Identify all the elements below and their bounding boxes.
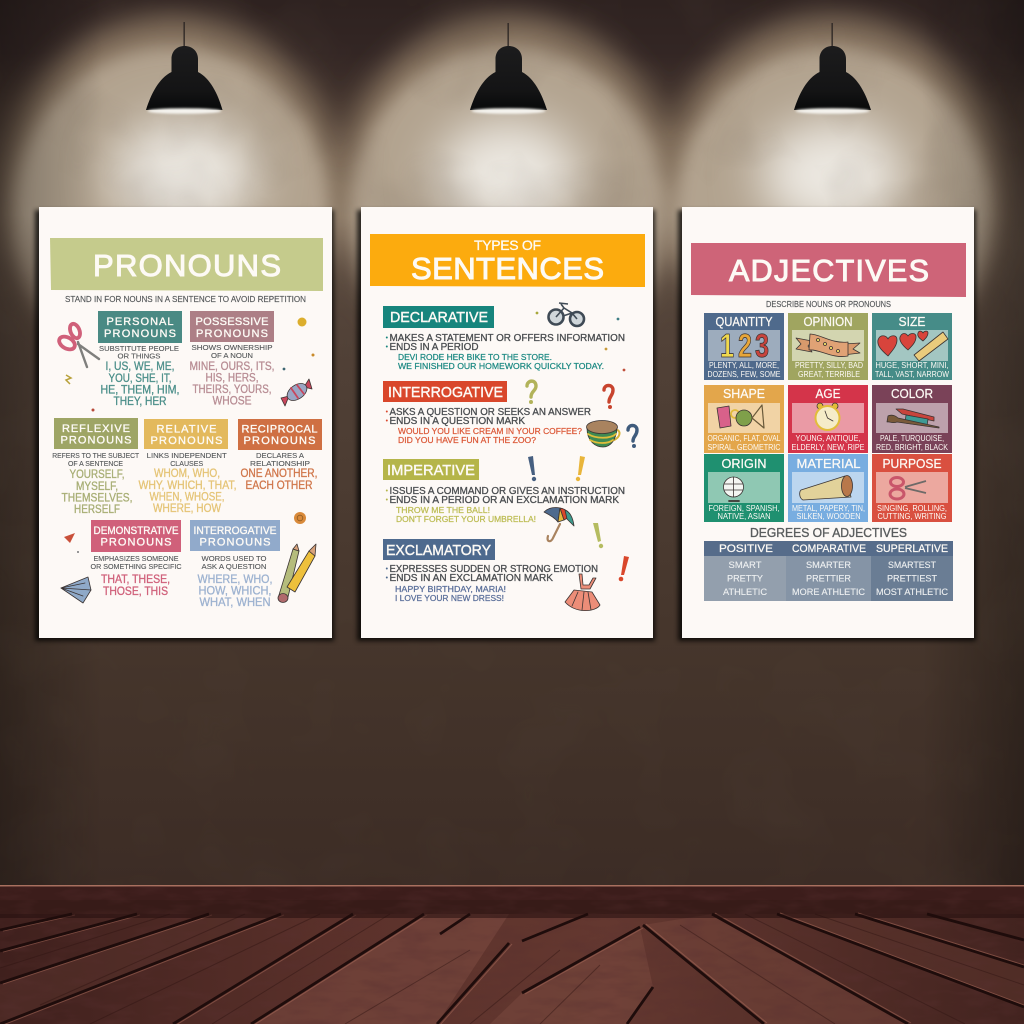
card: color: PALE, TURQUOISE,	[880, 434, 944, 443]
table: degrees of adjectives: MOST ATHLETIC	[876, 587, 948, 598]
relative pronouns: RELATIVE	[156, 424, 216, 436]
card: shape: SHAPE	[723, 387, 765, 401]
interrogative pronouns: ASK A QUESTION	[202, 562, 266, 571]
icon: ribbon	[796, 334, 860, 357]
interrogative pronouns	[190, 520, 280, 609]
section: interrogative	[383, 381, 591, 445]
baseboard	[0, 885, 1024, 915]
card: shape	[704, 385, 784, 453]
interrogative pronouns: WHERE, WHO,	[198, 573, 272, 586]
personal pronouns: THEY, HER	[114, 395, 166, 408]
card: opinion: GREAT, TERRIBLE	[798, 370, 860, 379]
personal pronouns: YOU, SHE, IT,	[108, 372, 172, 385]
icon: exclamation red	[619, 556, 629, 581]
icon: dress	[565, 574, 600, 611]
card: color: RED, BRIGHT, BLACK	[876, 443, 949, 452]
card: purpose: SINGING, ROLLING,	[877, 504, 947, 513]
title: types of sentences	[370, 234, 645, 287]
demonstrative pronouns: THAT, THESE,	[101, 573, 170, 586]
icon: scissors	[890, 478, 926, 499]
reflexive pronouns: OF A SENTENCE	[68, 459, 123, 468]
reflexive pronouns	[52, 418, 140, 516]
icon: globe	[724, 477, 744, 501]
possessive pronouns	[190, 311, 274, 408]
card: quantity	[704, 313, 784, 380]
demonstrative pronouns	[90, 520, 182, 598]
title: pronouns	[50, 238, 323, 291]
relative pronouns: WHOM, WHO,	[154, 467, 220, 480]
reflexive pronouns: HERSELF	[74, 503, 120, 516]
icon: question mark blue	[628, 426, 637, 448]
card: purpose: CUTTING, WRITING	[878, 512, 946, 521]
personal pronouns: SUBSTITUTE PEOPLE	[99, 344, 179, 353]
lamp 2	[470, 23, 547, 114]
icon: candy	[281, 379, 312, 406]
icon: scissors	[57, 322, 99, 367]
section: imperative: IMPERATIVE	[387, 462, 475, 479]
icon: shapes	[717, 405, 764, 428]
possessive pronouns: PRONOUNS	[196, 328, 268, 340]
possessive pronouns: POSSESSIVE	[196, 316, 268, 328]
reciprocal pronouns: DECLARES A	[256, 451, 305, 460]
lamp 1	[146, 22, 222, 114]
icon: umbrella	[544, 507, 574, 541]
card: color	[872, 385, 952, 453]
demonstrative pronouns: DEMONSTRATIVE	[94, 525, 178, 537]
section: imperative: ENDS IN A PERIOD OR AN EXCLAMATION MARK	[390, 495, 619, 506]
possessive pronouns: OF A NOUN	[211, 351, 253, 360]
icon: numbers: 3	[755, 327, 769, 364]
card: purpose	[872, 454, 952, 522]
relative pronouns: WHY, WHICH, THAT,	[138, 479, 236, 492]
card: material: MATERIAL	[796, 457, 861, 471]
reciprocal pronouns: PRONOUNS	[244, 435, 316, 447]
card: size: TALL, VAST, NARROW	[875, 370, 949, 379]
section: interrogative: INTERROGATIVE	[388, 384, 503, 401]
icon: question mark olive	[527, 381, 536, 404]
card: size	[872, 313, 952, 380]
section: interrogative: ENDS IN A QUESTION MARK	[390, 416, 525, 427]
card: quantity: DOZENS, FEW, SOME	[708, 370, 780, 379]
card: material	[788, 454, 868, 522]
section: exclamatory: ENDS IN AN EXCLAMATION MARK	[390, 573, 553, 584]
icon: paper plane	[61, 577, 91, 603]
reflexive pronouns: YOURSELF,	[70, 468, 124, 481]
personal pronouns	[98, 311, 182, 408]
demonstrative pronouns: THOSE, THIS	[103, 585, 168, 598]
card: age	[788, 385, 868, 453]
possessive pronouns: SHOWS OWNERSHIP	[192, 343, 272, 352]
icon: exclamation olive	[593, 523, 603, 548]
floor and baseboard	[0, 885, 1024, 1024]
section: imperative	[383, 459, 625, 524]
reflexive pronouns: MYSELF,	[76, 480, 118, 493]
icon: alarm clock	[816, 403, 840, 430]
panel: pronouns poster	[39, 207, 332, 638]
personal pronouns: HE, THEM, HIM,	[100, 384, 180, 396]
table: degrees of adjectives: PRETTY	[727, 574, 764, 584]
table: degrees of adjectives: ATHLETIC	[723, 587, 767, 598]
icon: swirl and confetti	[66, 318, 314, 553]
interrogative pronouns: PRONOUNS	[200, 536, 270, 548]
reciprocal pronouns: EACH OTHER	[246, 479, 312, 492]
icon: exclamation navy	[528, 456, 536, 481]
panel: sentences poster	[361, 207, 653, 638]
table: degrees of adjectives	[704, 541, 953, 601]
panel: adjectives poster	[682, 207, 974, 638]
table: degrees of adjectives: POSITIVE	[719, 543, 773, 555]
card: size: HUGE, SHORT, MINI,	[876, 361, 948, 370]
card: shape: ORGANIC, FLAT, OVAL	[708, 434, 781, 443]
possessive pronouns: THEIRS, YOURS,	[192, 383, 272, 396]
interrogative pronouns: WORDS USED TO	[202, 554, 267, 563]
reciprocal pronouns: RELATIONSHIP	[250, 459, 310, 468]
section: imperative: ISSUES A COMMAND OR GIVES AN INSTRUCTION	[390, 486, 625, 497]
title: types of sentences: TYPES OF	[474, 237, 541, 253]
personal pronouns: I, US, WE, ME,	[106, 360, 174, 373]
icon: exclamation yellow	[576, 456, 585, 481]
title: adjectives	[691, 243, 966, 297]
reciprocal pronouns: ONE ANOTHER,	[240, 467, 318, 480]
card: origin: NATIVE, ASIAN	[718, 512, 771, 521]
card: size: SIZE	[898, 315, 926, 329]
relative pronouns: WHERE, HOW	[153, 502, 221, 515]
relative pronouns	[138, 419, 236, 515]
reciprocal pronouns: RECIPROCAL	[242, 424, 318, 436]
section: declarative: WE FINISHED OUR HOMEWORK QUICKLY TODAY.	[398, 361, 604, 371]
section: interrogative: WOULD YOU LIKE CREAM IN YOUR COFFEE?	[398, 426, 582, 436]
card: opinion	[788, 313, 868, 380]
relative pronouns: PRONOUNS	[150, 435, 222, 447]
possessive pronouns: MINE, OURS, ITS,	[190, 360, 274, 373]
heading: degrees of adjectives: DEGREES OF ADJECTIVES	[750, 526, 907, 540]
reflexive pronouns: REFERS TO THE SUBJECT	[52, 451, 140, 460]
wood planks	[0, 913, 1024, 1024]
personal pronouns: PRONOUNS	[104, 328, 176, 340]
reciprocal pronouns	[238, 419, 322, 492]
possessive pronouns: HIS, HERS,	[206, 372, 258, 384]
subtitle: DESCRIBE NOUNS OR PRONOUNS	[766, 299, 891, 309]
title: pronouns: PRONOUNS	[93, 248, 281, 283]
icon: bicycle	[548, 303, 584, 326]
section: declarative: DECLARATIVE	[390, 309, 488, 326]
table: degrees of adjectives: COMPARATIVE	[792, 543, 866, 555]
confetti dots	[536, 312, 625, 371]
section: imperative: DON'T FORGET YOUR UMBRELLA!	[396, 514, 536, 524]
section: declarative: ENDS IN A PERIOD	[390, 342, 478, 353]
interrogative pronouns: INTERROGATIVE	[194, 525, 276, 537]
possessive pronouns: WHOSE	[212, 394, 252, 408]
section: interrogative: ASKS A QUESTION OR SEEKS AN ANSWER	[390, 407, 591, 418]
relative pronouns: WHEN, WHOSE,	[150, 490, 224, 504]
table: degrees of adjectives: SMART	[728, 560, 762, 571]
icon: numbers	[720, 327, 769, 364]
reflexive pronouns: THEMSELVES,	[62, 492, 132, 504]
icon: pencils	[278, 544, 316, 602]
personal pronouns: PERSONAL	[106, 316, 174, 328]
reflexive pronouns: REFLEXIVE	[62, 423, 130, 435]
card: color: COLOR	[891, 387, 933, 401]
section: exclamatory: HAPPY BIRTHDAY, MARIA!	[395, 584, 506, 594]
card: purpose: PURPOSE	[882, 457, 942, 471]
icon: crayon and paintbrush	[887, 409, 939, 428]
section: exclamatory: I LOVE YOUR NEW DRESS!	[395, 593, 504, 603]
icon: coffee cup	[586, 420, 620, 447]
section: declarative: DEVI RODE HER BIKE TO THE STORE.	[398, 352, 552, 362]
table: degrees of adjectives: PRETTIER	[806, 574, 851, 584]
icon: numbers: 1	[720, 327, 734, 364]
card: age: AGE	[816, 387, 840, 401]
title: types of sentences: SENTENCES	[411, 251, 604, 286]
icon: small red plane	[64, 533, 75, 543]
subtitle: STAND IN FOR NOUNS IN A SENTENCE TO AVOID REPETITION	[65, 294, 306, 304]
table: degrees of adjectives: SUPERLATIVE	[876, 543, 948, 555]
icon: log	[800, 476, 852, 500]
table: degrees of adjectives: SMARTER	[806, 560, 851, 571]
table: degrees of adjectives: PRETTIEST	[887, 574, 937, 584]
card: quantity: PLENTY, ALL, MORE,	[709, 361, 779, 370]
card: origin: ORIGIN	[722, 457, 766, 471]
demonstrative pronouns: OR SOMETHING SPECIFIC	[90, 562, 182, 571]
reflexive pronouns: PRONOUNS	[60, 434, 132, 446]
title: adjectives: ADJECTIVES	[729, 254, 929, 288]
card: origin	[704, 454, 784, 522]
icon: question mark red	[604, 386, 613, 409]
interrogative pronouns: WHAT, WHEN	[200, 596, 270, 609]
card: shape: SPIRAL, GEOMETRIC	[708, 443, 781, 452]
card: material: METAL, PAPERY, TIN,	[792, 504, 865, 513]
table: degrees of adjectives: SMARTEST	[888, 560, 936, 571]
demonstrative pronouns: PRONOUNS	[100, 536, 172, 548]
section: declarative: MAKES A STATEMENT OR OFFERS INFORMATION	[390, 333, 625, 344]
relative pronouns: CLAUSES	[170, 459, 203, 468]
card: opinion: PRETTY, SILLY, BAD	[795, 361, 863, 370]
card: material: SILKEN, WOODEN	[796, 512, 861, 521]
card: quantity: QUANTITY	[716, 315, 773, 329]
card: opinion: OPINION	[804, 315, 852, 329]
card: origin: FOREIGN, SPANISH,	[708, 504, 780, 513]
table: degrees of adjectives: MORE ATHLETIC	[792, 587, 865, 598]
icon: hearts and ruler	[878, 331, 948, 361]
section: exclamatory: EXPRESSES SUDDEN OR STRONG EMOTION	[390, 564, 598, 575]
icon: numbers: 2	[738, 327, 752, 364]
section: exclamatory	[383, 539, 598, 603]
interrogative pronouns: HOW, WHICH,	[198, 584, 272, 598]
poster shadows	[35, 210, 976, 641]
card: age: ELDERLY, NEW, RIPE	[792, 443, 864, 452]
section: declarative	[383, 306, 625, 371]
lamp 3	[794, 23, 871, 114]
demonstrative pronouns: EMPHASIZES SOMEONE	[94, 554, 178, 563]
section: exclamatory: EXCLAMATORY	[386, 542, 491, 559]
card: age: YOUNG, ANTIQUE,	[796, 434, 860, 443]
personal pronouns: OR THINGS	[118, 352, 160, 360]
section: imperative: THROW ME THE BALL!	[396, 505, 490, 515]
section: interrogative: DID YOU HAVE FUN AT THE ZOO?	[398, 435, 536, 445]
relative pronouns: LINKS INDEPENDENT	[147, 451, 227, 460]
